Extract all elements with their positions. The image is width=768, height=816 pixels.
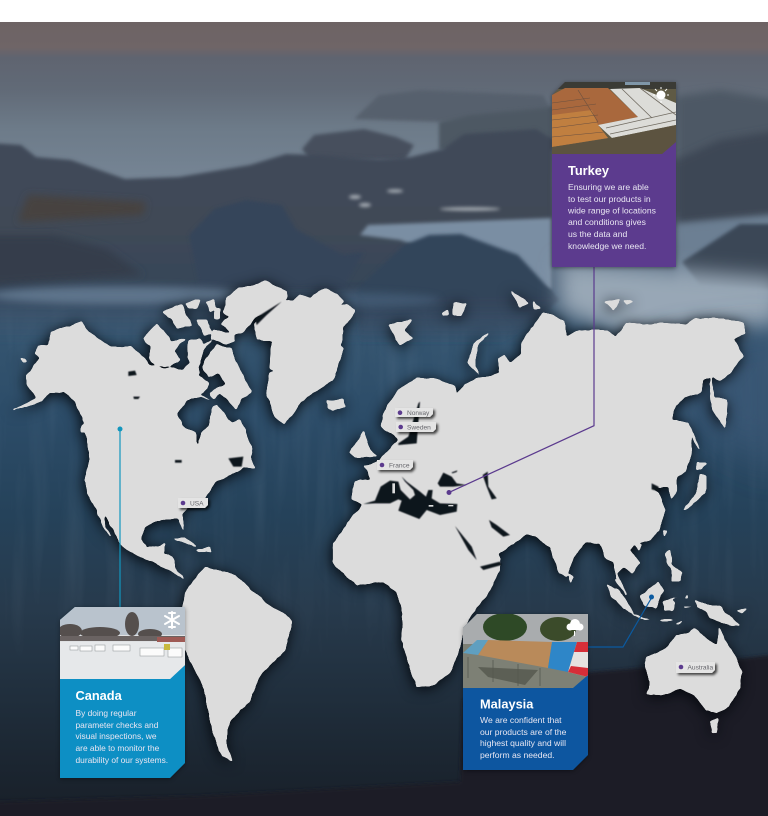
map: Mediterranean, Black Sea, Caspian, Red Sea, Gulf [363,470,510,560]
label: Norway [395,408,433,417]
text: Malaysia description: perform as needed. [480,750,555,760]
text: Turkey description: wide range of locations [567,206,656,216]
text: Malaysia description: our products are of the [480,727,567,737]
map: inland seas and lakes [128,302,660,570]
heading: Malaysia: Malaysia [480,696,534,712]
text: Canada description: By doing regular [76,708,137,718]
label: Sweden: Sweden [407,424,431,431]
photo: test panels on a roof in Turkey [552,82,676,154]
text: Canada description: visual inspections, we [76,731,157,741]
map: South-East Asia and Australia [607,550,747,733]
text: Turkey description: knowledge we need. [568,241,646,251]
label: Australia: Australia [688,664,713,671]
heading: Canada: Canada [76,688,123,703]
text: Turkey description: and conditions gives [568,217,646,227]
map: North America and Greenland [13,282,355,578]
map: South America [178,567,292,760]
icon: sun [653,87,669,103]
text: Canada description: are able to monitor the [76,743,160,753]
text: Turkey description: to test our products in [568,194,651,204]
heading: Turkey: Turkey [568,163,610,178]
label: France [377,460,413,470]
icon: snowflake [165,612,179,628]
text: Canada description: durability of our systems. [76,755,168,765]
landmasses [13,282,747,760]
map: Mediterranean islands [392,483,453,507]
text: Canada description: parameter checks and [76,720,159,730]
photo: snow-covered test site in Canada [58,607,185,679]
label: USA [178,498,208,508]
panel: Malaysia [463,613,588,770]
text: Turkey description: Ensuring we are able [568,182,649,192]
label: USA: USA [190,500,204,507]
label: France: France [389,462,410,469]
text: Turkey description: us the data and [568,229,627,239]
text: Malaysia description: highest quality and will [480,738,566,748]
label: Sweden [396,422,436,432]
label: Norway: Norway [407,410,430,417]
text: Malaysia description: We are confident that [480,715,562,725]
photo: test racks in Malaysia [463,613,588,688]
connector: Turkey [446,267,594,495]
label: Australia [676,662,715,673]
icon: cloud with rain [566,619,584,636]
connector: Canada [118,426,122,607]
map: Eurasia and Africa [333,292,745,687]
connector: Malaysia [588,594,654,647]
panel: Canada [58,607,185,778]
world map [13,282,747,760]
panel: Turkey [552,82,676,267]
